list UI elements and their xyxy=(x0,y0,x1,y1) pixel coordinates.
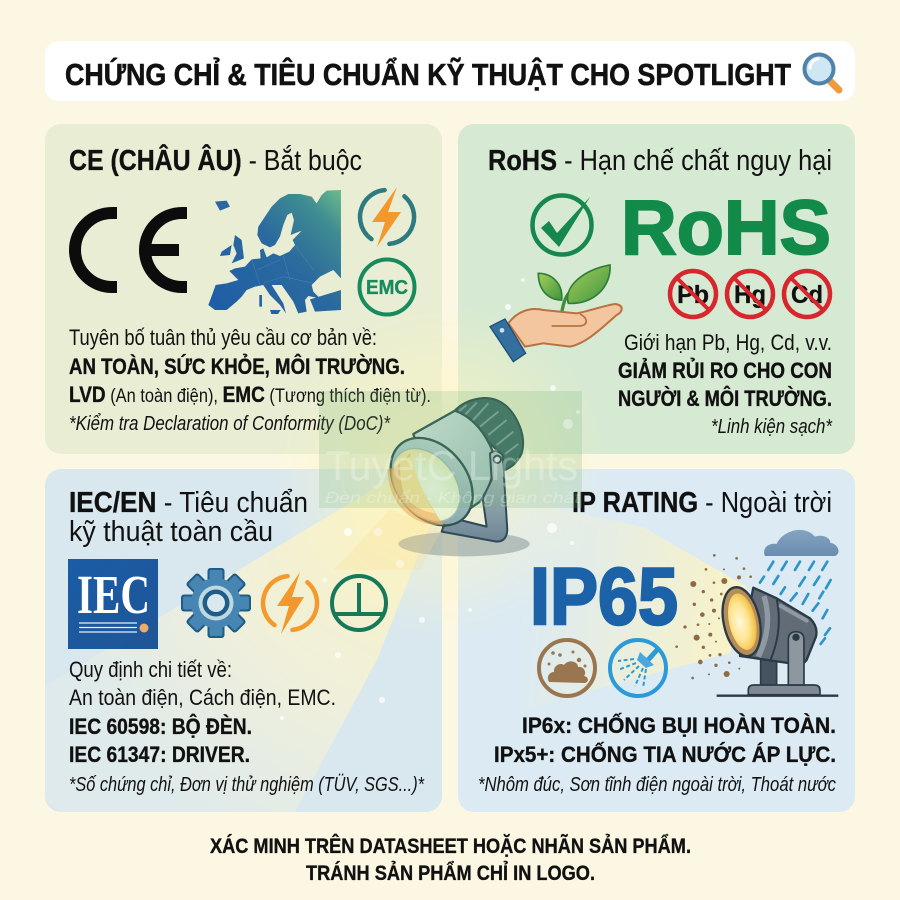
icon: LVD lightning xyxy=(360,187,414,247)
icon: magnifier xyxy=(804,54,839,90)
dust particles xyxy=(675,554,752,679)
watermark: Đèn chuẩn - Không gian chất xyxy=(325,489,581,507)
title bar xyxy=(45,41,855,101)
RoHS description: *Linh kiện sạch* xyxy=(711,416,833,438)
IEC description: An toàn điện, Cách điện, EMC. xyxy=(69,685,336,710)
icon: lightning xyxy=(263,572,317,634)
icon: no cadmium: Cd xyxy=(791,281,823,309)
sparkles xyxy=(280,278,580,720)
icon: rain cloud xyxy=(760,530,839,644)
light beam toward IEC panel xyxy=(45,478,432,812)
RoHS description xyxy=(618,330,833,438)
RoHS description: NGƯỜI & MÔI TRƯỜNG. xyxy=(618,386,832,411)
IEC logo xyxy=(68,559,158,649)
CE heading: CE (CHÂU ÂU) - Bắt buộc xyxy=(69,143,362,177)
title: CHỨNG CHỈ & TIÊU CHUẨN KỸ THUẬT CHO SPOTLIGHT xyxy=(65,56,791,92)
icon: gear xyxy=(181,568,251,638)
icon: hand with plant xyxy=(490,265,622,362)
panel background: IP rating xyxy=(458,469,855,812)
map: Europe xyxy=(208,190,341,314)
RoHS heading: RoHS - Hạn chế chất nguy hại xyxy=(488,145,832,177)
icon: dust xyxy=(539,640,595,696)
panel: IP rating xyxy=(458,469,855,812)
CE description xyxy=(69,325,431,435)
icon: no lead: Pb xyxy=(677,281,709,309)
footer note: TRÁNH SẢN PHẨM CHỈ IN LOGO. xyxy=(306,862,595,885)
IEC description: *Số chứng chỉ, Đơn vị thử nghiệm (TÜV, SGS...)* xyxy=(69,774,425,796)
RoHS description: Giới hạn Pb, Hg, Cd, v.v. xyxy=(624,330,832,355)
panel: CE xyxy=(45,124,442,454)
IEC heading: IEC/EN - Tiêu chuẩn xyxy=(69,487,308,519)
RoHS description: GIẢM RỦI RO CHO CON xyxy=(618,358,832,383)
CE description: LVD (An toàn điện), EMC (Tương thích điện từ). xyxy=(69,382,431,407)
RoHS logo: RoHS xyxy=(621,185,831,271)
watermark: TuyetC Lights xyxy=(325,442,578,489)
IEC heading: kỹ thuật toàn cầu xyxy=(69,516,273,548)
footer note xyxy=(210,834,691,885)
IEC description: IEC 60598: BỘ ĐÈN. xyxy=(69,714,252,739)
IP description: IPx5+: CHỐNG TIA NƯỚC ÁP LỰC. xyxy=(494,741,836,767)
footer note: XÁC MINH TRÊN DATASHEET HOẶC NHÃN SẢN PHẨM. xyxy=(210,834,691,858)
icon: no mercury xyxy=(727,271,773,317)
IP description xyxy=(478,712,836,796)
icon: no lead xyxy=(670,271,716,317)
central spotlight xyxy=(333,398,530,570)
icon: earth ground xyxy=(332,576,386,630)
panel background: IEC/EN xyxy=(45,469,442,812)
icon: CE mark xyxy=(75,213,187,287)
watermark xyxy=(319,391,582,508)
icon: no mercury: Hg xyxy=(734,281,766,309)
IEC description: IEC 61347: DRIVER. xyxy=(69,742,250,767)
IEC heading xyxy=(69,487,308,548)
panel background: CE xyxy=(45,124,442,454)
IP65 label: IP65 xyxy=(530,552,678,642)
IEC logo: IEC xyxy=(77,564,150,625)
icon: check mark xyxy=(532,196,592,254)
IP heading: IP RATING - Ngoài trời xyxy=(572,487,832,519)
outdoor spotlight xyxy=(717,584,838,696)
central glow xyxy=(270,300,610,640)
panel background: RoHS xyxy=(458,124,855,454)
IEC description: Quy định chi tiết về: xyxy=(69,657,232,682)
CE description: Tuyên bố tuân thủ yêu cầu cơ bản về: xyxy=(69,325,377,350)
IP description: *Nhôm đúc, Sơn tĩnh điện ngoài trời, Thoát nước xyxy=(478,774,836,796)
CE description: AN TOÀN, SỨC KHỎE, MÔI TRƯỜNG. xyxy=(69,354,405,379)
icon: EMC xyxy=(360,260,414,314)
panel: IEC/EN xyxy=(45,469,442,812)
IP description: IP6x: CHỐNG BỤI HOÀN TOÀN. xyxy=(522,712,836,738)
icon: no cadmium xyxy=(784,271,830,317)
CE description: *Kiểm tra Declaration of Conformity (DoC)* xyxy=(69,413,391,435)
IEC description xyxy=(69,657,425,796)
panel: RoHS xyxy=(458,124,855,454)
light beam from outdoor lamp xyxy=(520,500,747,712)
icon: water spray xyxy=(610,640,666,696)
icon: EMC: EMC xyxy=(366,277,408,299)
